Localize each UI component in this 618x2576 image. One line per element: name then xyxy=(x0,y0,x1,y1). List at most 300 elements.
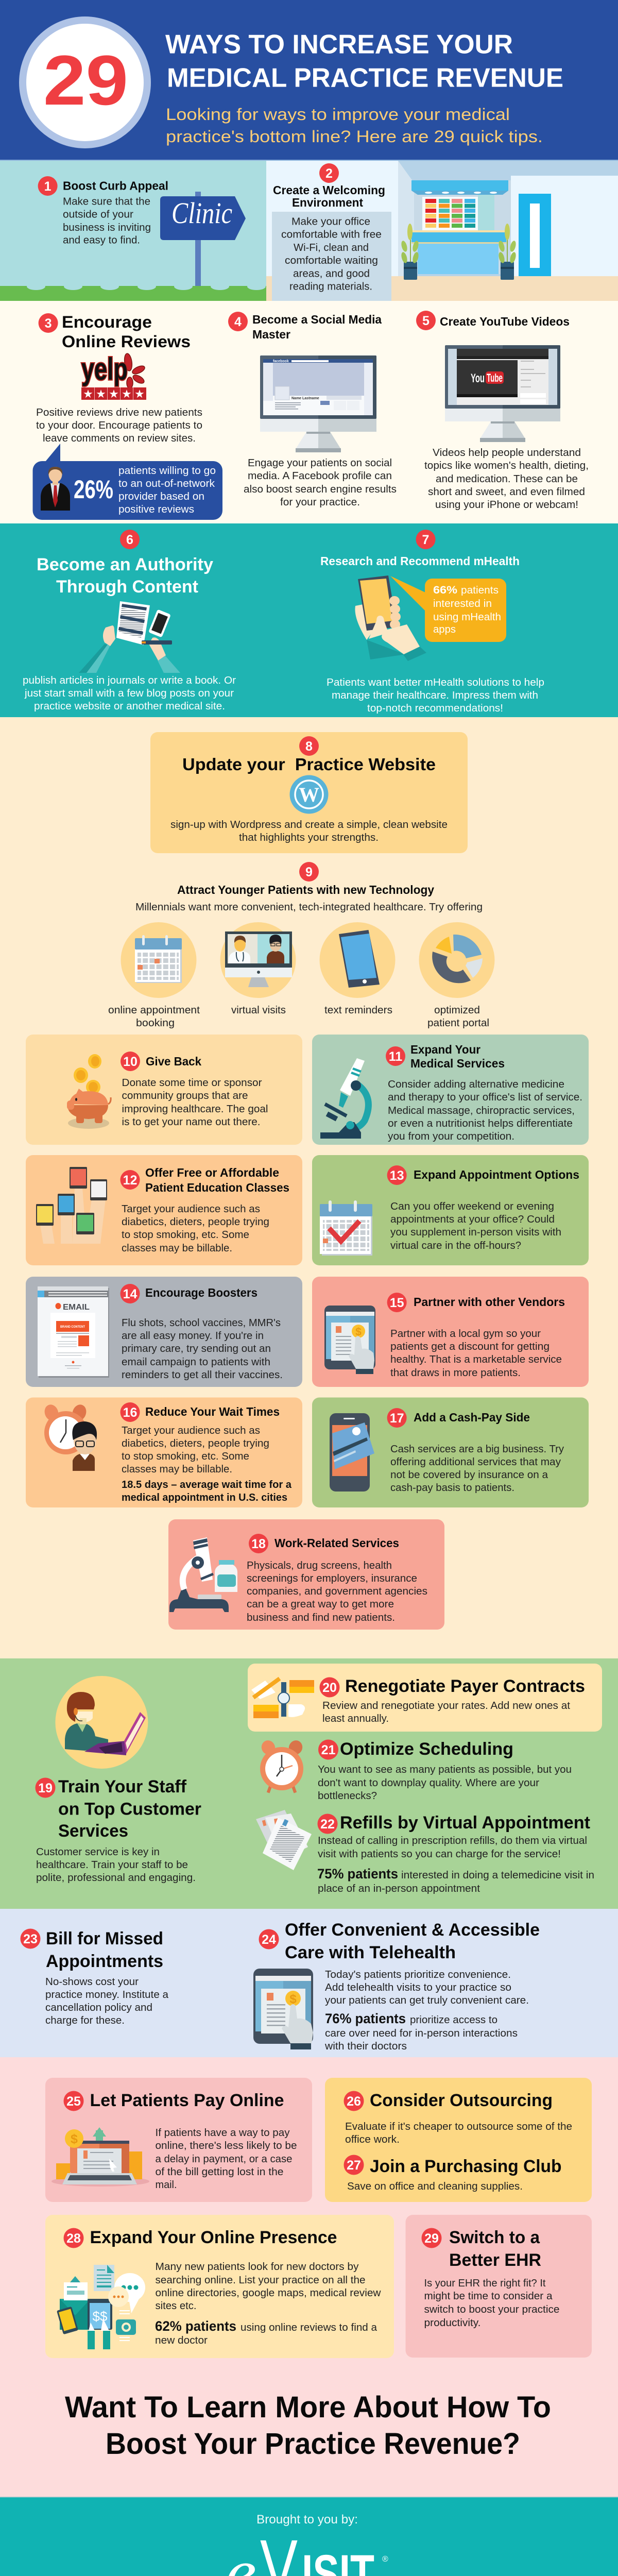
heading: expand medical services xyxy=(410,1043,505,1070)
heading: education classes xyxy=(145,1166,289,1194)
heading: update website: Update your Practice Website xyxy=(182,755,436,774)
text: tip 25 body xyxy=(156,2127,297,2191)
tip 22 refills xyxy=(256,1810,594,1894)
text: tip 21 body: You want to see as many patients as possible, but you xyxy=(318,1764,572,1775)
heading: bill for missed appointments: Appointments xyxy=(46,1952,163,1971)
heading: let patients pay online: Let Patients Pay Online xyxy=(90,2091,284,2110)
icon: monitor with youtube page: You xyxy=(471,371,485,385)
stat: 18.5 days: 18.5 days – average wait time for a xyxy=(122,1479,292,1490)
panel: tip 17 cash pay xyxy=(312,1397,589,1507)
heading: renegotiate payer contracts: Renegotiate Payer Contracts xyxy=(345,1676,585,1696)
icon: microscope xyxy=(320,1058,368,1139)
panel: tip 2 text box xyxy=(272,212,391,301)
badge 24 xyxy=(259,1929,279,1950)
badge 29 xyxy=(421,2228,442,2248)
icon: left plant xyxy=(400,224,420,280)
text: tip 2 body: Wi-Fi, clean and xyxy=(294,242,369,253)
badge 10 xyxy=(121,1052,140,1071)
badge 24: 24 xyxy=(262,1933,276,1947)
panel: tips 26 and 27 xyxy=(325,2078,592,2202)
tip 5 youtube xyxy=(416,311,589,511)
badge 9 xyxy=(299,862,319,882)
text: tip 2 body: Make your office xyxy=(291,216,370,228)
text: tip 5 body: topics like women's health, dieting, xyxy=(424,460,589,471)
heading: partner vendors: Partner with other Vendors xyxy=(414,1295,565,1309)
badge 12 xyxy=(121,1170,140,1190)
icon: calendar circle xyxy=(121,922,197,998)
text: tip 13 body: appointments at your office? Could xyxy=(390,1214,555,1225)
heading: research mhealth: Research and Recommend mHealth xyxy=(320,554,520,568)
text: tip 29 body: Is your EHR the right fit? It xyxy=(424,2278,546,2289)
panel: tip 14 boosters xyxy=(26,1277,302,1387)
badge 3 xyxy=(39,313,58,333)
heading: refills by virtual appointment: Refills by Virtual Appointment xyxy=(340,1813,590,1833)
icon: piggy bank xyxy=(67,1054,111,1129)
panel: tip 16 wait times xyxy=(26,1397,302,1507)
text: tip 6 body: publish articles in journals or write a book. Or xyxy=(23,675,236,686)
text: tip 22 body: Instead of calling in prescription refills, do them via virtual xyxy=(318,1835,587,1846)
icon: email mockup: EMAIL xyxy=(63,1303,90,1312)
tip 21 scheduling xyxy=(259,1738,572,1802)
text: tip 15 body: Partner with a local gym so your xyxy=(390,1328,541,1340)
text: tip 16 body: classes may be billable. xyxy=(122,1464,232,1475)
text: tip 5 body: short and sweet, and even filmed xyxy=(428,486,585,498)
text: tip 25 body: of the bill getting lost in the xyxy=(156,2166,283,2178)
stat: 62 percent xyxy=(155,2318,377,2346)
icon: laptop with coins xyxy=(52,2127,149,2187)
badge 17 xyxy=(387,1408,407,1428)
text: tip 24 body: Add telehealth visits to your practice so xyxy=(325,1982,511,1993)
icon: wordpress logo: W xyxy=(299,783,319,806)
text: tip 20 body: least annually. xyxy=(322,1713,389,1724)
badge: 29 circle xyxy=(19,16,151,148)
stat: 75 percent: place of an in-person appointment xyxy=(318,1883,480,1894)
icon: online presence collage xyxy=(57,2265,145,2349)
text: tip 17 body: not be covered by insurance on a xyxy=(390,1469,548,1481)
badge: 29 circle: 29 xyxy=(43,41,128,120)
icon: door xyxy=(519,194,551,276)
text: tip 16 body xyxy=(122,1425,269,1475)
heading: consider outsourcing: Consider Outsourcing xyxy=(370,2091,553,2110)
icon: phone with credit card xyxy=(330,1413,374,1492)
text: tip 26 body xyxy=(345,2121,572,2145)
text: tip 14 body: email campaign to patients with xyxy=(122,1357,270,1368)
title: WAYS TO INCREASE YOUR xyxy=(165,30,513,60)
text: tip 17 body: offering additional services that may xyxy=(390,1456,561,1468)
stat: 62 percent: using online reviews to find a xyxy=(241,2322,377,2333)
heading: encourage online reviews xyxy=(62,313,191,351)
text: tip 8 body: sign-up with Wordpress and create a simple, clean website xyxy=(170,819,448,831)
icon: five stars: ★ xyxy=(134,388,145,401)
callout: 26 percent: patients willing to go xyxy=(118,465,216,477)
panel: tip 29 better EHR xyxy=(406,2215,592,2358)
badge 25: 25 xyxy=(66,2094,81,2109)
stat: 18.5 days: medical appointment in U.S. cities xyxy=(122,1492,287,1503)
stat: 62 percent: 62% patients xyxy=(155,2318,236,2334)
text: tip 5 body: using your iPhone or webcam! xyxy=(435,499,578,511)
icon: five stars: ★ xyxy=(96,388,106,401)
badge 15: 15 xyxy=(390,1296,404,1310)
text: tip 18 body: business and find new patients. xyxy=(247,1612,395,1623)
stat: 76 percent: 76% patients xyxy=(325,2011,406,2026)
subtitle: Looking for ways to improve your medical xyxy=(166,105,510,124)
badge 9: 9 xyxy=(305,865,313,879)
icon: display board tiles xyxy=(422,197,478,230)
text: tip 22 body xyxy=(318,1835,587,1860)
text: tip 18 body: screenings for employers, insurance xyxy=(247,1573,417,1584)
badge 20 xyxy=(319,1677,340,1697)
icon: five stars: ★ xyxy=(83,388,93,401)
text: tip 18 body xyxy=(247,1560,427,1623)
heading: welcoming environment: Create a Welcoming xyxy=(273,183,385,197)
text: tip 8 body xyxy=(170,819,448,843)
badge 21: 21 xyxy=(321,1743,335,1757)
heading: switch to a better EHR: Switch to a xyxy=(449,2228,540,2247)
badge 18 xyxy=(249,1534,268,1553)
text: tip 4 body: also boost search engine results xyxy=(244,484,397,495)
text: tip 3 body: to your door. Encourage patients to xyxy=(36,420,202,431)
subtitle xyxy=(166,105,543,146)
text: tip 7 body: top-notch recommendations! xyxy=(367,703,503,714)
text: tip 4 body xyxy=(244,457,397,508)
badge 10: 10 xyxy=(123,1055,138,1069)
heading: work related services: Work-Related Services xyxy=(274,1536,399,1550)
text: tip 12 body: to stop smoking, etc. Some xyxy=(122,1229,249,1241)
text: tip 21 body: don't want to downplay quality. Where are your xyxy=(318,1777,539,1789)
heading: train your staff: on Top Customer xyxy=(58,1799,201,1819)
heading: bill for missed appointments: Bill for Missed xyxy=(46,1929,163,1948)
logo: eVisit xyxy=(226,2524,388,2576)
panel: tip 10 give back xyxy=(26,1035,302,1145)
text: tip 29 body: might be time to consider a xyxy=(424,2291,553,2302)
icon: clinic sign xyxy=(160,192,246,290)
heading: attract younger patients: Attract Younger Patients with new Technology xyxy=(177,883,434,896)
text: tip 2 body: reading materials. xyxy=(289,281,372,293)
text: tip 10 body: improving healthcare. The goal xyxy=(122,1104,268,1115)
heading: boost curb appeal: Boost Curb Appeal xyxy=(63,179,168,193)
text: tip 12 body: diabetics, dieters, people trying xyxy=(122,1216,269,1228)
heading: encourage online reviews: Encourage xyxy=(62,313,152,331)
labels: tip 9 options: virtual visits xyxy=(231,1005,286,1016)
badge 8: 8 xyxy=(305,739,313,754)
badge 19 xyxy=(35,1777,56,1798)
text: tip 5 body: Videos help people understand xyxy=(433,447,581,459)
heading: social media master xyxy=(252,313,382,341)
badge 8 xyxy=(299,736,319,756)
text: tip 18 body: Physicals, drug screens, health xyxy=(247,1560,392,1571)
icon: monitor with facebook page: facebook xyxy=(273,360,289,363)
icon: five stars xyxy=(81,387,146,401)
text: tip 6 body: practice website or another medical site. xyxy=(34,701,225,712)
heading: expand online presence: Expand Your Online Presence xyxy=(90,2228,337,2247)
icon: monitor with youtube page xyxy=(445,345,560,442)
icon: phone with hand and coin xyxy=(324,1306,375,1374)
text: tip 13 body xyxy=(390,1201,561,1251)
badge 11: 11 xyxy=(389,1049,402,1064)
text: tip 23 body: cancellation policy and xyxy=(45,2002,152,2013)
tip 3 online reviews xyxy=(33,313,222,520)
text: tip 5 body xyxy=(424,447,589,511)
text: tip 25 body: a delay in payment, or a case xyxy=(156,2154,293,2165)
call to action heading xyxy=(65,2391,551,2461)
heading: become an authority: Become an Authority xyxy=(37,555,213,574)
icon: awning xyxy=(411,180,508,195)
text: tip 29 body xyxy=(424,2278,559,2329)
stat: 75 percent xyxy=(317,1866,594,1894)
callout: 66 percent: 66% xyxy=(433,584,457,596)
text: tip 4 body: for your practice. xyxy=(280,497,360,508)
labels: tip 9 options xyxy=(108,1005,489,1029)
icon: yelp logo: yelp xyxy=(81,352,128,386)
text: tip 15 body xyxy=(390,1328,562,1379)
heading: education classes: Offer Free or Affordable xyxy=(145,1166,279,1179)
callout: 26 percent: provider based on xyxy=(118,491,204,502)
heading: bill for missed appointments xyxy=(46,1929,163,1971)
heading: expand medical services: Medical Services xyxy=(410,1057,505,1070)
labels: tip 9 options: text reminders xyxy=(324,1005,392,1016)
text: tip 14 body: reminders to get all their vaccines. xyxy=(122,1369,283,1381)
badge 6 xyxy=(120,530,140,549)
callout: 66 percent: using mHealth xyxy=(433,612,501,623)
badge 1 xyxy=(38,176,58,196)
badge 5: 5 xyxy=(422,314,430,328)
callout: 66 percent xyxy=(390,576,506,642)
text: tip 1 body xyxy=(63,196,151,246)
text: tip 17 body: cash-pay basis to patients. xyxy=(390,1482,514,1494)
text: tip 24 body: Today's patients prioritize convenience. xyxy=(325,1969,511,1980)
text: tip 13 body: you supplement in-person visits with xyxy=(390,1227,561,1238)
icon: smartphone circle xyxy=(319,922,396,998)
icon: virtual visit monitor circle xyxy=(220,922,296,998)
text: tip 2 body: comfortable with free xyxy=(281,229,382,240)
icon: monitor with facebook page: Name Lastname xyxy=(291,397,319,400)
icon: hands exchanging pen and watch xyxy=(251,1679,314,1718)
badge 16: 16 xyxy=(123,1405,137,1420)
section: tips 1 and 2 storefront xyxy=(0,160,618,301)
text: brought to you by: Brought to you by: xyxy=(256,2513,358,2527)
tip 23 missed appointments xyxy=(21,1929,169,2026)
heading: wait times: Reduce Your Wait Times xyxy=(145,1405,280,1418)
panel: tip 15 vendors xyxy=(312,1277,589,1387)
text: tip 11 body: or even a nutritionist helps differentiate xyxy=(388,1118,573,1129)
text: tip 4 body: media. A Facebook profile can xyxy=(248,470,392,482)
badge 27: 27 xyxy=(347,2158,361,2173)
heading: welcoming environment: Environment xyxy=(292,196,363,209)
section: tips 3 to 5 xyxy=(0,301,618,523)
heading: education classes: Patient Education Classes xyxy=(145,1181,289,1194)
text: tip 19 body: polite, professional and engaging. xyxy=(36,1872,196,1884)
panel: tip 25 pay online xyxy=(45,2078,312,2202)
labels: tip 9 options: booking xyxy=(136,1018,175,1029)
text: tip 2 body: comfortable waiting xyxy=(285,255,378,266)
text: tip 24 body: your patients can get truly convenient care. xyxy=(325,1995,529,2006)
badge 3: 3 xyxy=(45,316,52,331)
badge 22: 22 xyxy=(320,1817,335,1832)
text: tip 24 body xyxy=(325,1969,529,2006)
panel: tip 20 payer contracts xyxy=(248,1664,602,1732)
icon: donut chart circle xyxy=(419,922,494,998)
text: tip 13 body: virtual care in the off-hours? xyxy=(390,1240,521,1251)
badge 11 xyxy=(386,1046,405,1066)
text: tip 12 body xyxy=(122,1204,269,1254)
badge 15 xyxy=(387,1293,407,1312)
text: tip 25 body: mail. xyxy=(156,2179,177,2191)
heading: social media master: Master xyxy=(252,328,290,341)
badge 17: 17 xyxy=(390,1411,404,1426)
text: tip 14 body: are all easy money. If you're in xyxy=(122,1330,264,1342)
icon: email mockup: BRAND CONTENT xyxy=(60,1326,85,1329)
text: tip 19 body: healthcare. Train your staff to be xyxy=(36,1859,188,1871)
badge 13: 13 xyxy=(390,1168,404,1183)
icon: monitor with facebook page xyxy=(260,355,376,452)
heading: welcoming environment xyxy=(273,183,385,209)
callout: 66 percent: interested in xyxy=(433,598,492,609)
text: tip 29 body: switch to boost your practice xyxy=(424,2304,559,2315)
stat: 76 percent xyxy=(324,2011,518,2052)
icon: online presence collage: $$ xyxy=(93,2309,108,2324)
icon: alarm clock and man xyxy=(42,1403,97,1471)
text: tip 25 body: If patients have a way to pay xyxy=(156,2127,289,2139)
badge 22 xyxy=(317,1814,338,1834)
badge 23 xyxy=(21,1929,40,1948)
text: tip 16 body: diabetics, dieters, people trying xyxy=(122,1438,269,1449)
badge 25 xyxy=(64,2091,83,2111)
badge 7 xyxy=(416,530,436,549)
badge 18: 18 xyxy=(251,1537,266,1551)
icon: reception desk xyxy=(411,230,506,274)
section: pink tips 25 to 29 and call to action xyxy=(0,2057,618,2497)
call to action heading: Want To Learn More About How To xyxy=(65,2391,551,2424)
panel: tip 13 appointment options xyxy=(312,1155,589,1265)
text: tip 11 body xyxy=(388,1079,582,1142)
badge 20: 20 xyxy=(322,1681,337,1695)
badge 14 xyxy=(121,1284,140,1303)
text: tip 2 body xyxy=(281,216,382,293)
badge 16 xyxy=(121,1402,140,1422)
text: tip 20 body xyxy=(322,1700,570,1724)
heading: encourage boosters: Encourage Boosters xyxy=(145,1286,258,1299)
heading: social media master: Become a Social Media xyxy=(252,313,382,326)
panel: tip 8 website xyxy=(150,732,468,853)
text: tip 15 body: healthy. That is a marketable service xyxy=(390,1354,562,1365)
stat: 18.5 days xyxy=(122,1479,292,1503)
text: tip 11 body: Medical massage, chiropractic services, xyxy=(388,1105,575,1116)
badge 2: 2 xyxy=(325,166,333,181)
labels: tip 9 options: patient portal xyxy=(427,1018,489,1029)
heading: convenient care: Care with Telehealth xyxy=(285,1943,456,1962)
tip 24 telehealth xyxy=(253,1920,540,2052)
icon: five stars: ★ xyxy=(122,388,132,401)
section: tips 6 and 7 xyxy=(0,523,618,717)
text: tip 3 body: Positive reviews drive new patients xyxy=(36,407,202,418)
text: tip 7 body: manage their healthcare. Impress them with xyxy=(332,690,538,701)
badge 12: 12 xyxy=(123,1173,137,1188)
icon: clinic sign: Clinic xyxy=(171,196,232,230)
text: tip 2 body: areas, and good xyxy=(293,268,370,279)
heading: give back: Give Back xyxy=(146,1055,201,1068)
section: blue tips 23 and 24 xyxy=(0,1909,618,2057)
text: tip 4 body: Engage your patients on social xyxy=(248,457,392,469)
text: tip 1 body: outside of your xyxy=(63,209,133,221)
stat: 76 percent: with their doctors xyxy=(324,2041,407,2052)
panel: tip 18 work-related xyxy=(168,1519,444,1630)
tip 4 social media xyxy=(228,312,397,508)
text: tip 25 body: online, there's less likely to be xyxy=(156,2140,297,2151)
text: tip 3 body xyxy=(36,407,202,444)
text: tip 21 body: bottlenecks? xyxy=(318,1790,377,1802)
badge 13 xyxy=(387,1165,407,1185)
text: tip 1 body: Make sure that the xyxy=(63,196,150,207)
icon: white microscope and bottle xyxy=(169,1537,237,1612)
heading: switch to a better EHR: Better EHR xyxy=(449,2250,541,2270)
text: tip 23 body xyxy=(45,1976,169,2026)
text: tip 28 body: searching online. List your practice on all the xyxy=(156,2275,366,2286)
callout: 26 percent: to an out-of-network xyxy=(118,478,215,489)
tip 6 authority xyxy=(23,530,236,712)
title: MEDICAL PRACTICE REVENUE xyxy=(167,63,563,93)
icon: businessman xyxy=(41,467,70,511)
header band xyxy=(0,0,618,160)
callout: 66 percent: patients xyxy=(461,585,499,596)
badge 6: 6 xyxy=(126,533,133,547)
heading: convenient care: Offer Convenient & Accessible xyxy=(285,1920,540,1940)
text: tip 22 body: visit with patients so you can charge for the service! xyxy=(318,1849,561,1860)
text: tip 10 body: is to get your name out there. xyxy=(122,1116,261,1128)
tip 9 younger patients xyxy=(108,862,494,1029)
text: tip 10 body xyxy=(122,1077,268,1128)
stat: 75 percent: 75% patients xyxy=(317,1866,398,1882)
subtitle: practice's bottom line? Here are 29 quick tips. xyxy=(166,127,543,146)
badge 28 xyxy=(64,2228,83,2248)
text: tip 20 body: Review and renegotiate your rates. Add new ones at xyxy=(322,1700,570,1711)
heading: cash pay side: Add a Cash-Pay Side xyxy=(414,1411,530,1424)
text: tip 7 body xyxy=(327,677,544,714)
badge 5 xyxy=(416,311,436,330)
badge 23: 23 xyxy=(23,1932,38,1946)
tip 19 train staff xyxy=(35,1676,201,1884)
text: tip 12 body: Target your audience such as xyxy=(122,1204,260,1215)
stat: 76 percent: care over need for in-person interactions xyxy=(325,2028,518,2039)
text: tip 16 body: to stop smoking, etc. Some xyxy=(122,1451,249,1462)
badge 21 xyxy=(318,1739,338,1760)
heading: youtube videos: Create YouTube Videos xyxy=(440,315,570,328)
panel: tip 28 online presence xyxy=(45,2215,394,2358)
heading: train your staff: Services xyxy=(58,1821,128,1841)
icon: hands holding phones xyxy=(36,1167,107,1244)
icon: five stars: ★ xyxy=(109,388,119,401)
icon: right plant xyxy=(497,224,517,280)
text: tip 10 body: Donate some time or sponsor xyxy=(122,1077,262,1089)
heading: train your staff: Train Your Staff xyxy=(58,1777,187,1797)
text: tip 26 body: office work. xyxy=(345,2134,400,2145)
text: tip 14 body xyxy=(122,1317,283,1381)
badge 14: 14 xyxy=(123,1287,137,1301)
badge 28: 28 xyxy=(66,2231,81,2246)
text: tip 11 body: you from your competition. xyxy=(388,1131,514,1142)
callout: 66 percent: apps xyxy=(433,624,456,635)
stat: 76 percent: prioritize access to xyxy=(410,2014,497,2026)
text: tip 14 body: primary care, try sending out an xyxy=(122,1343,271,1354)
panel: tip 12 education classes xyxy=(26,1155,302,1265)
text: tip 27 body: Save on office and cleaning supplies. xyxy=(347,2181,523,2192)
section: cream tips 8 to 18 xyxy=(0,717,618,1658)
footer band xyxy=(0,2497,618,2576)
heading: expand medical services: Expand Your xyxy=(410,1043,480,1056)
icon: prescription papers xyxy=(256,1810,312,1870)
hedge xyxy=(0,283,266,301)
heading: switch to a better EHR xyxy=(449,2228,541,2270)
badge 29: 29 xyxy=(424,2231,439,2246)
